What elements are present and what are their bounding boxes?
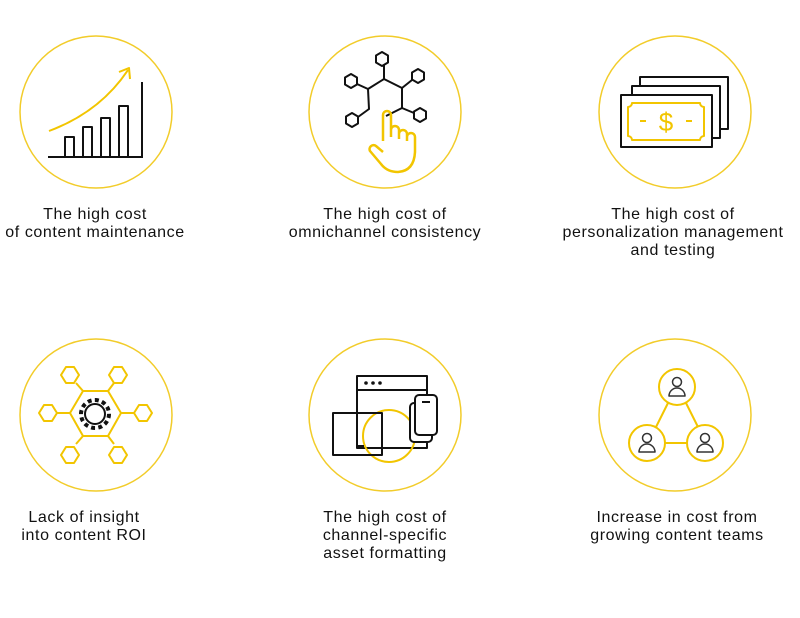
caption 4: Lack of insight bbox=[28, 509, 140, 526]
caption 6 bbox=[590, 509, 764, 544]
caption 5: asset formatting bbox=[323, 545, 447, 562]
caption 2 bbox=[289, 206, 481, 241]
caption 1: The high cost bbox=[43, 206, 147, 223]
caption 4: into content ROI bbox=[21, 527, 147, 544]
caption 3: The high cost of bbox=[611, 206, 735, 223]
icon: money bills: $ bbox=[659, 107, 674, 137]
caption 4 bbox=[21, 509, 147, 544]
icon: team bbox=[599, 339, 751, 491]
caption 6: growing content teams bbox=[590, 527, 764, 544]
icon: money bills bbox=[599, 36, 751, 188]
icon: growth chart bbox=[20, 36, 172, 188]
caption 1: of content maintenance bbox=[5, 224, 185, 241]
icon: network hand bbox=[309, 36, 461, 188]
icon: devices bbox=[309, 339, 461, 491]
caption 5: The high cost of bbox=[323, 509, 447, 526]
caption 5: channel-specific bbox=[323, 527, 447, 544]
caption 5 bbox=[323, 509, 447, 562]
caption 3 bbox=[562, 206, 784, 259]
caption 3: and testing bbox=[631, 242, 715, 259]
caption 6: Increase in cost from bbox=[596, 509, 758, 526]
caption 2: The high cost of bbox=[323, 206, 447, 223]
icon: gear hexagons bbox=[20, 339, 172, 491]
caption 1 bbox=[5, 206, 185, 241]
caption 3: personalization management bbox=[562, 224, 784, 241]
caption 2: omnichannel consistency bbox=[289, 224, 481, 241]
